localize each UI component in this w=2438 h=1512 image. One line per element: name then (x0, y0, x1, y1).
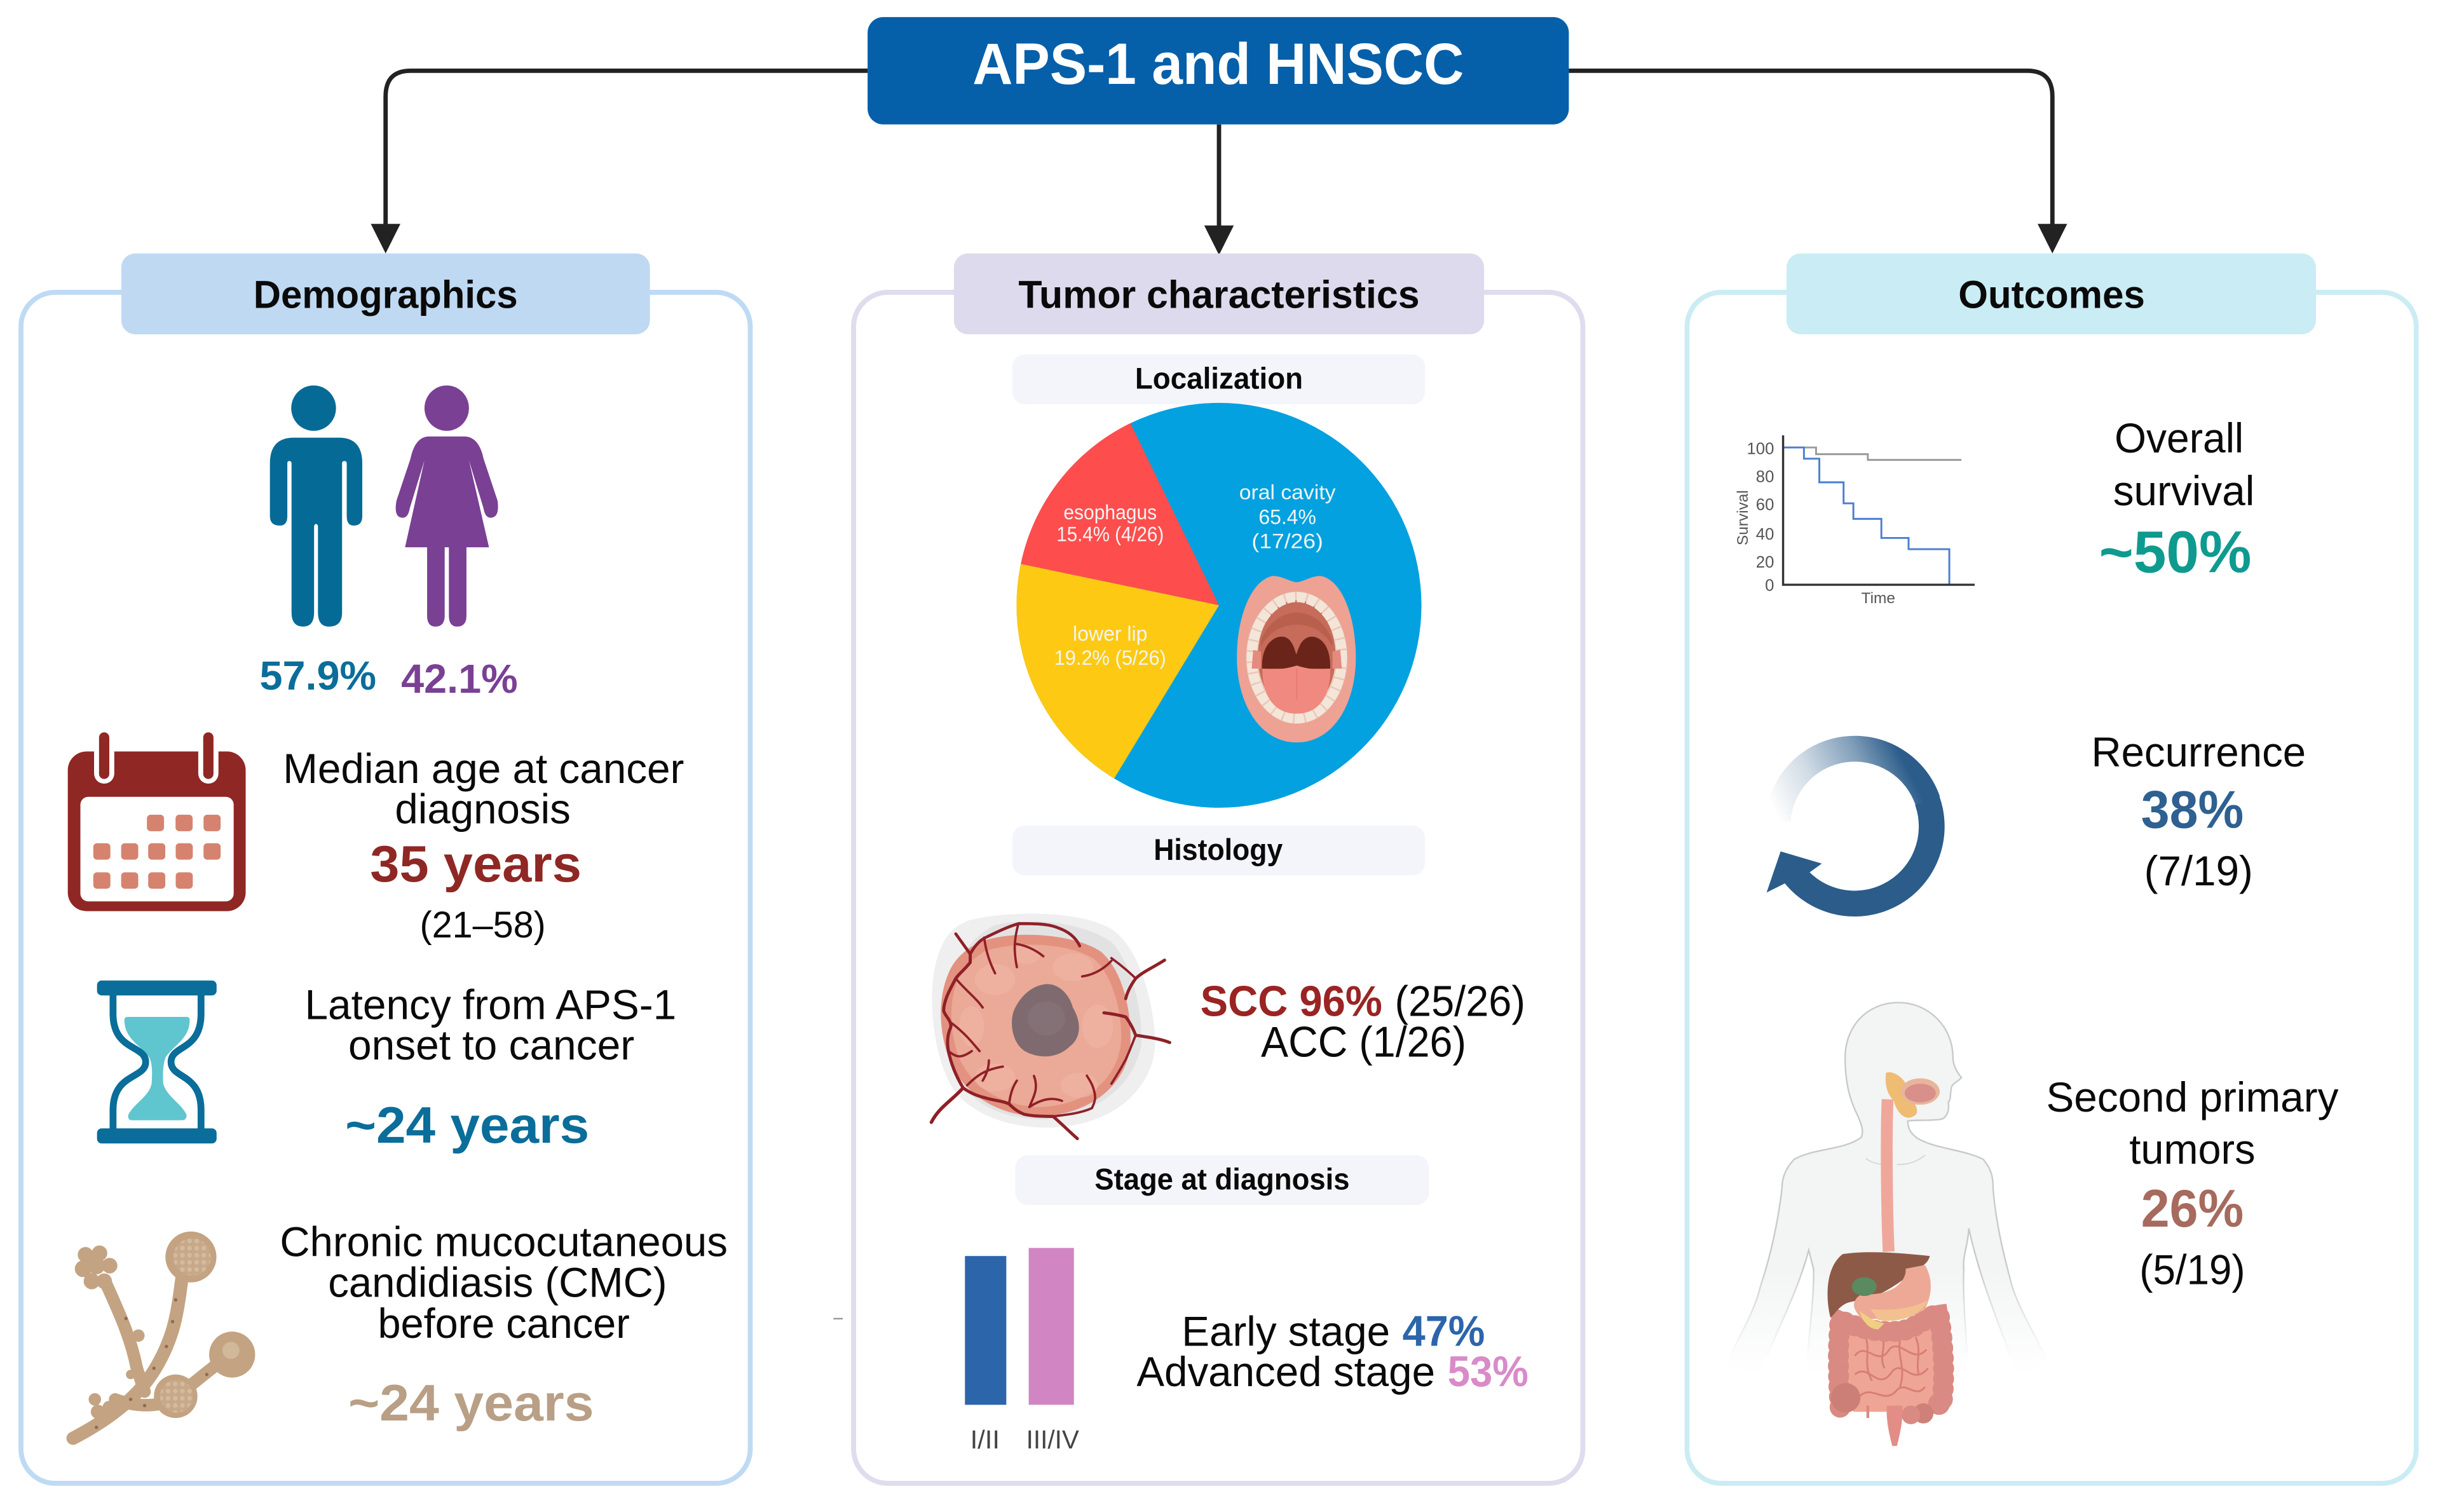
pie label: oral cavity: oral cavity (1239, 480, 1336, 503)
text: overall survival: survival (2113, 468, 2254, 514)
text: chronic mucocutaneous candidiasis: ~24 years (348, 1375, 594, 1432)
text: recurrence: 38% (2141, 780, 2244, 840)
title (868, 17, 1569, 125)
subheading: histology: Histology (1154, 833, 1283, 867)
text: chronic mucocutaneous candidiasis (280, 1219, 728, 1432)
text: stage results: Early stage (1182, 1308, 1390, 1354)
panel: tumor characteristics (833, 254, 1583, 1483)
illustration: human digestive system (1726, 1002, 2048, 1446)
stat: female share: 42.1% (401, 657, 518, 702)
text: stage results: 47% (1403, 1307, 1485, 1355)
text: second primary tumors: 26% (2141, 1179, 2244, 1238)
chart: survival curve: Time (1862, 590, 1895, 607)
panel: demographics (21, 254, 750, 1483)
text: histology results: ACC (1/26) (1261, 1019, 1466, 1066)
connector: title to demographics (371, 71, 868, 254)
subheading: localization: Localization (1135, 362, 1303, 396)
pie label: oral cavity: 65.4% (1258, 505, 1316, 528)
text: second primary tumors: Second primary (2046, 1074, 2339, 1120)
pie label: esophagus: 15.4% (4/26) (1056, 522, 1164, 545)
icon: hourglass (97, 981, 217, 1143)
text: stage results: Advanced stage (1136, 1349, 1435, 1395)
pie label: esophagus (1056, 501, 1164, 545)
subheading: histology (1012, 826, 1425, 875)
text: histology results: (25/26) (1394, 978, 1525, 1026)
connector: title to tumor characteristics (1204, 125, 1234, 255)
text: overall survival (2099, 415, 2254, 585)
heading: outcomes: Outcomes (1958, 273, 2145, 316)
chart: survival curve: 80 (1756, 468, 1774, 486)
chart: survival curve: 60 (1756, 496, 1774, 514)
panel outline (854, 292, 1583, 1483)
subheading: stage at diagnosis (1016, 1155, 1429, 1205)
subheading: localization (1012, 355, 1425, 404)
text: recurrence (2091, 729, 2306, 894)
text: median age (283, 746, 684, 946)
text: latency: Latency from APS-1 (305, 982, 676, 1028)
bar chart: stage at diagnosis: III/IV (1026, 1425, 1079, 1454)
text: recurrence: Recurrence (2091, 729, 2306, 775)
chart: survival curve: 0 (1765, 577, 1774, 595)
text: latency (305, 982, 676, 1154)
subheading: stage at diagnosis: Stage at diagnosis (1094, 1163, 1349, 1197)
text: median age: Median age at cancer (283, 746, 684, 792)
text: second primary tumors: tumors (2129, 1126, 2256, 1173)
text: overall survival: Overall (2115, 415, 2244, 461)
icon: male figure (270, 385, 362, 627)
icon: female figure (396, 385, 498, 627)
pie label: lower lip (1054, 622, 1166, 669)
title: APS-1 and HNSCC (972, 32, 1464, 97)
text: second primary tumors (2046, 1074, 2339, 1293)
icon: candida fungus (73, 1232, 255, 1438)
text: latency: ~24 years (345, 1097, 589, 1154)
pie label: oral cavity: (17/26) (1251, 529, 1323, 552)
panel: outcomes (1687, 254, 2416, 1483)
pie label: lower lip: lower lip (1073, 622, 1147, 645)
text: median age: 35 years (370, 836, 582, 893)
panel outline (21, 292, 750, 1483)
pie label: lower lip: 19.2% (5/26) (1054, 646, 1166, 669)
heading: tumor characteristics (954, 254, 1484, 334)
chart: survival curve: 100 (1747, 440, 1774, 458)
text: median age: diagnosis (395, 786, 571, 832)
chart: survival curve: 20 (1756, 554, 1774, 571)
text: stage results: 53% (1448, 1348, 1529, 1396)
icon: calendar (68, 728, 246, 911)
chart: survival curve: 40 (1756, 526, 1774, 543)
heading: tumor characteristics: Tumor characteristics (1018, 273, 1420, 316)
panel outline (1687, 292, 2416, 1483)
text: latency: onset to cancer (348, 1022, 634, 1068)
pie label: esophagus: esophagus (1063, 501, 1157, 524)
text: histology results: SCC 96% (1201, 978, 1382, 1026)
heading: demographics (121, 254, 650, 334)
text: recurrence: (7/19) (2144, 848, 2253, 894)
text: chronic mucocutaneous candidiasis: before cancer (378, 1300, 630, 1347)
heading: outcomes (1787, 254, 2316, 334)
icon: tumor with blood vessels (931, 913, 1169, 1139)
icon: recurrence arrow (1767, 749, 1931, 904)
connector: title to outcomes (1569, 71, 2067, 254)
bar chart: stage at diagnosis: I/II (970, 1425, 1000, 1454)
pie chart: localization (1016, 403, 1422, 808)
text: stage results (1136, 1307, 1529, 1396)
text: chronic mucocutaneous candidiasis: Chronic mucocutaneous (280, 1219, 728, 1265)
heading: demographics: Demographics (254, 273, 518, 316)
pie label: oral cavity (1239, 480, 1336, 552)
stat: male share: 57.9% (260, 653, 376, 698)
chart: survival curve (1734, 435, 1975, 607)
text: histology results (1201, 978, 1525, 1066)
icon: open mouth (1237, 576, 1356, 742)
text: median age: (21–58) (420, 904, 546, 946)
text: second primary tumors: (5/19) (2139, 1247, 2245, 1293)
bar chart: stage at diagnosis (965, 1248, 1079, 1454)
chart: survival curve: Survival (1734, 490, 1752, 545)
text: chronic mucocutaneous candidiasis: candidiasis (CMC) (328, 1259, 667, 1305)
text: overall survival: ~50% (2099, 519, 2251, 585)
